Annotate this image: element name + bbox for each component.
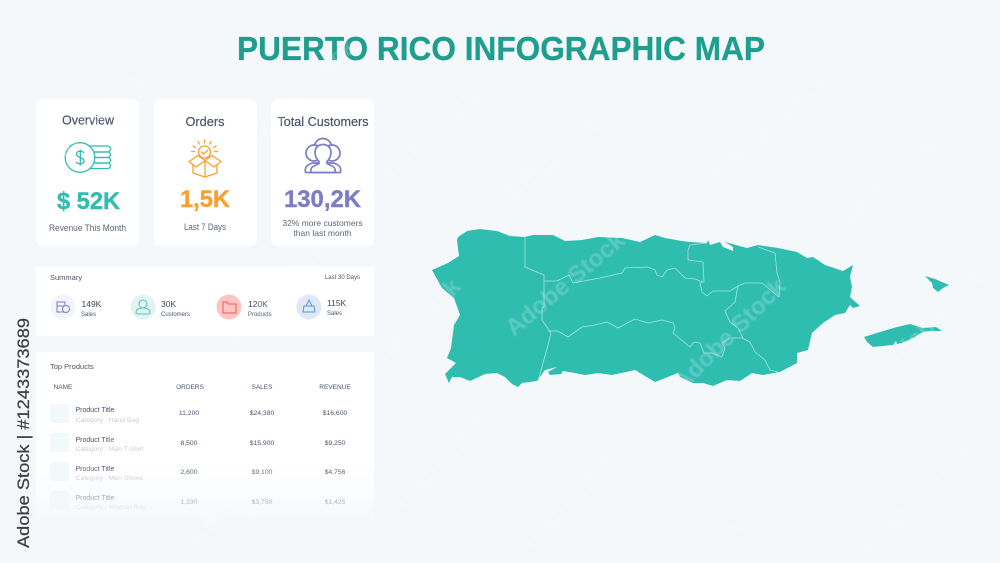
table header: ORDERS (176, 384, 205, 391)
watermark text: Adobe Stock (183, 428, 307, 551)
row: woman bag: Category : Woman Bag (76, 504, 146, 511)
metric: customers: 130,2K (284, 186, 361, 213)
row: men t-shirt: Product Title (76, 437, 115, 444)
icon: people (305, 138, 341, 172)
stat: products (216, 294, 272, 320)
table header: SALES (252, 384, 273, 391)
heading: overview: Overview (62, 112, 115, 128)
caption: last 7 days: Last 7 Days (184, 222, 227, 232)
stat: customers (130, 294, 190, 320)
watermark text: Adobe Stock (878, 253, 1000, 376)
watermark text: Adobe Stock (378, 63, 502, 186)
row: men shoes: 2,600 (180, 469, 198, 476)
map: Puerto Rico (432, 229, 949, 387)
heading: top products: Top Products (50, 362, 94, 371)
stat: sales: 149K (82, 299, 102, 309)
row: men shoes (50, 462, 346, 482)
row: men t-shirt (50, 433, 346, 453)
watermark text: Adobe Stock (500, 226, 631, 342)
panel: overview card (36, 99, 139, 246)
heading: orders: Orders (186, 114, 225, 129)
watermark text: Adobe Stock (73, 358, 197, 481)
caption: customer comparison: 32% more customers (282, 218, 363, 228)
watermark text: Adobe Stock (668, 273, 792, 396)
row: men shoes: Product Title (76, 466, 115, 473)
panel: top products (36, 352, 374, 526)
row: men shoes: $9,100 (252, 469, 273, 476)
stat: sales secondary (296, 294, 347, 320)
row: woman bag: Product Title (76, 495, 115, 502)
stat: sales secondary: 115K (327, 298, 347, 308)
watermark text: Adobe Stock (343, 273, 467, 396)
watermark text: Adobe Stock (838, 113, 962, 236)
label: last 30 days: Last 30 Days (325, 275, 360, 281)
row: woman bag: 1,230 (180, 499, 198, 506)
heading: total customers: Total Customers (278, 114, 369, 129)
row: woman bag: $3,750 (252, 499, 273, 506)
main island (432, 229, 860, 387)
stat: customers: Customers (161, 312, 190, 318)
watermark text: Adobe Stock (858, 438, 982, 561)
panel: total customers card (271, 99, 374, 246)
caption: revenue this month: Revenue This Month (49, 223, 126, 233)
row: hand bag: $24,380 (250, 410, 274, 417)
row: hand bag (50, 404, 347, 424)
row: woman bag: $1,425 (325, 499, 346, 506)
stat: sales secondary: Sales (327, 311, 342, 317)
stock credit: Adobe Stock | #1243373689 (14, 318, 33, 548)
row: men shoes: $4,756 (325, 469, 346, 476)
row: hand bag: $16,600 (323, 410, 347, 417)
row: hand bag: Category : Hand Bag (76, 417, 139, 424)
stat: products: Products (248, 312, 272, 318)
watermark text: Adobe Stock (218, 228, 342, 351)
Vieques island (864, 324, 942, 347)
region borders (525, 237, 780, 381)
heading: summary: Summary (50, 273, 82, 282)
stat: sales: Sales (81, 312, 96, 318)
stat: sales (50, 294, 102, 320)
watermark text: Adobe Stock (43, 48, 167, 171)
Culebra island (925, 276, 949, 292)
row: hand bag: 11,200 (179, 410, 199, 417)
table header (54, 384, 351, 391)
panel: summary (36, 267, 374, 336)
watermark text: Adobe Stock (718, 423, 842, 546)
watermark text: Adobe Stock (500, 91, 631, 207)
row: men t-shirt: $15,900 (250, 440, 274, 447)
icon: box with sun (189, 140, 221, 177)
table header: REVENUE (319, 384, 351, 391)
stat: products: 120K (248, 299, 268, 309)
row: hand bag: Product Title (76, 407, 115, 414)
metric: revenue: $ 52K (57, 188, 120, 215)
table header: NAME (54, 384, 73, 391)
stat: customers: 30K (161, 299, 176, 309)
watermark text: Adobe Stock (511, 438, 635, 561)
caption: customer comparison: than last month (293, 228, 352, 238)
metric: orders: 1,5K (180, 186, 230, 213)
watermark text: Adobe Stock (383, 398, 507, 521)
watermark text: Adobe Stock (705, 66, 836, 182)
row: men t-shirt: $9,250 (325, 440, 346, 447)
row: men t-shirt: 8,500 (180, 440, 198, 447)
row: woman bag (50, 491, 346, 511)
row: men shoes: Category : Men Shoes (76, 475, 144, 482)
row: men t-shirt: Category : Men T-Shirt (76, 446, 144, 453)
icon: coins (65, 143, 110, 172)
panel: orders card (154, 99, 257, 246)
watermark text: Adobe Stock (238, 33, 362, 156)
title: PUERTO RICO INFOGRAPHIC MAP (237, 31, 765, 68)
fade overlay on table (30, 465, 380, 527)
